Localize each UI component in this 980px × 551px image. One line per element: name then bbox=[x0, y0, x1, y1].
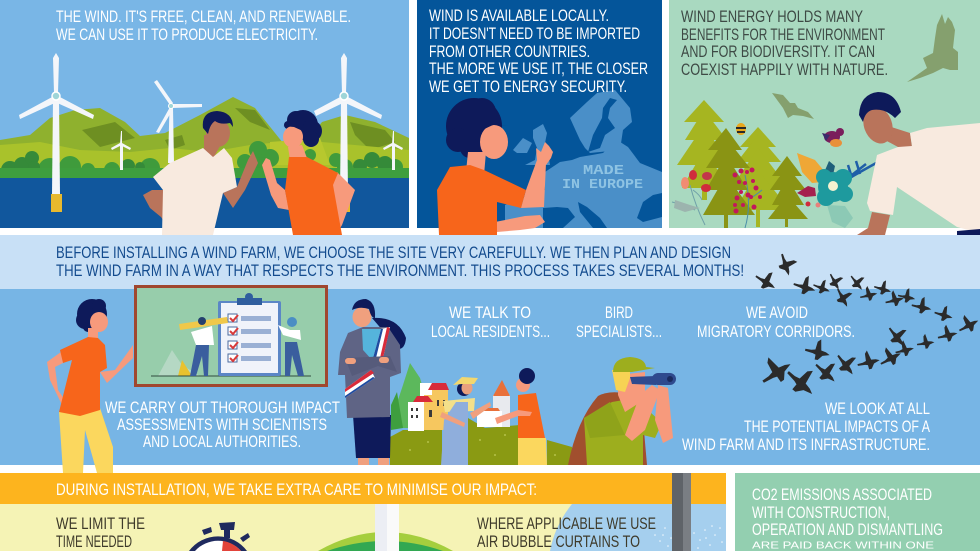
church bbox=[493, 395, 510, 427]
shirt bbox=[437, 165, 526, 235]
text: before installing: THE WIND FARM IN A WAY THAT RESPECTS THE ENVIRONMENT. THIS PROCESS TAKES SEVERAL MONTHS! bbox=[56, 261, 744, 280]
hair bbox=[352, 299, 375, 318]
strip: site selection bbox=[0, 235, 980, 289]
hair bbox=[446, 98, 502, 158]
text: impact assessments bbox=[105, 398, 340, 451]
lower arm bbox=[495, 215, 545, 232]
trousers bbox=[59, 408, 113, 473]
flower bouquet bbox=[797, 153, 878, 228]
neck bbox=[288, 145, 307, 157]
panel: CO2 emissions bbox=[735, 473, 980, 551]
text: available locally: WE GET TO ENERGY SECURITY. bbox=[429, 77, 627, 96]
heading: the wind bbox=[56, 7, 351, 44]
neck bbox=[885, 125, 912, 147]
text: bird specialists: BIRD bbox=[605, 303, 633, 322]
icon: bat bbox=[772, 93, 814, 119]
board: impact assessment bbox=[134, 285, 328, 387]
head bbox=[858, 102, 898, 148]
Mediterranean bbox=[543, 207, 575, 228]
fringe bbox=[284, 126, 301, 130]
face bbox=[618, 372, 645, 412]
arm bbox=[857, 212, 890, 235]
tree 3 bbox=[730, 127, 790, 227]
text: limit the time: WE LIMIT THE bbox=[56, 514, 145, 533]
text: impact assessments: WE CARRY OUT THOROUGH IMPACT bbox=[105, 398, 340, 417]
label: made in Europe: MADE bbox=[583, 163, 624, 179]
panel: planning bbox=[0, 285, 980, 473]
shoe bbox=[957, 229, 980, 235]
icon: wind turbine right bbox=[314, 53, 382, 212]
tree 1 bbox=[677, 100, 730, 200]
fringe bbox=[478, 122, 508, 132]
panel: benefits for biodiversity bbox=[669, 0, 980, 228]
binoculars bbox=[630, 376, 656, 385]
air bubbles bbox=[654, 524, 723, 549]
panel: during installation bbox=[0, 473, 726, 551]
text: talk to local residents: WE TALK TO bbox=[449, 303, 531, 322]
illustration: hills and sea bbox=[0, 97, 409, 228]
text: potential impacts bbox=[682, 399, 930, 454]
green hill bbox=[318, 532, 453, 551]
panel: wind is available locally bbox=[417, 0, 662, 228]
hair bbox=[203, 111, 233, 134]
jacket bbox=[338, 327, 401, 418]
text: limit the time: TIME NEEDED bbox=[56, 532, 132, 551]
sash upper bbox=[373, 327, 390, 358]
sash lower bbox=[345, 370, 375, 398]
person: birdwatcher bbox=[568, 357, 676, 465]
shirt bbox=[584, 398, 662, 465]
person: mayor with sash bbox=[338, 299, 406, 465]
icon: wind turbine centre bbox=[154, 80, 202, 163]
arm bbox=[521, 160, 546, 208]
head bbox=[480, 125, 508, 159]
tree 2 bbox=[703, 128, 755, 228]
crossed arms bbox=[345, 356, 397, 376]
text: migratory corridors bbox=[697, 303, 855, 341]
icon: small bird bbox=[822, 128, 844, 147]
woman in orange bbox=[495, 368, 547, 465]
blouse bbox=[362, 329, 381, 360]
skirt bbox=[353, 415, 391, 458]
head bbox=[352, 307, 372, 327]
label: made in Europe bbox=[562, 163, 643, 193]
text: during installation: DURING INSTALLATION, WE TAKE EXTRA CARE TO MINIMISE OUR IMPACT: bbox=[56, 480, 537, 499]
text: air bubble curtains bbox=[477, 514, 656, 551]
text: talk to local residents: LOCAL RESIDENTS... bbox=[431, 322, 550, 341]
text: available locally: FROM OTHER COUNTRIES. bbox=[429, 42, 590, 61]
text: air bubble curtains: AIR BUBBLE CURTAINS TO bbox=[477, 532, 640, 551]
text: bird specialists bbox=[576, 303, 662, 341]
neck bbox=[88, 328, 98, 340]
hills bbox=[390, 430, 442, 465]
person: man watching nature bbox=[857, 92, 980, 235]
white house bbox=[408, 402, 424, 431]
sleeve bbox=[584, 402, 625, 438]
man with pencil bbox=[179, 317, 228, 376]
text: CO2 payback: WITH CONSTRUCTION, bbox=[752, 503, 890, 522]
heading: the wind: THE WIND. IT'S FREE, CLEAN, AND RENEWABLE. bbox=[56, 7, 351, 26]
shirt bbox=[285, 157, 342, 235]
rosehips bbox=[672, 170, 712, 225]
shirt bbox=[59, 337, 107, 416]
shirt bbox=[153, 148, 237, 235]
text: available locally: WIND IS AVAILABLE LOCALLY. bbox=[429, 6, 609, 25]
water bbox=[550, 504, 726, 551]
Ireland bbox=[513, 138, 532, 153]
hair bbox=[76, 299, 107, 332]
woman pointing bbox=[278, 317, 304, 376]
Adriatic bbox=[578, 202, 607, 228]
Scandinavia and Finland bbox=[570, 90, 632, 153]
continent bbox=[505, 140, 662, 228]
icon: wind turbine left bbox=[19, 53, 94, 212]
legs bbox=[358, 455, 369, 465]
text: wind energy benefits: WIND ENERGY HOLDS MANY bbox=[681, 7, 863, 26]
Black Sea bbox=[637, 193, 662, 222]
ponytail bbox=[372, 318, 406, 349]
icon: small wind turbine right bbox=[383, 131, 403, 170]
text: wind energy benefits bbox=[681, 7, 888, 79]
yellow house bbox=[420, 383, 436, 397]
text: available locally: IT DOESN'T NEED TO BE IMPORTED bbox=[429, 24, 640, 43]
text: before installing bbox=[56, 243, 744, 280]
neck and arms bbox=[204, 135, 220, 157]
farmer woman bbox=[440, 377, 491, 465]
Britain bbox=[525, 124, 550, 165]
text: potential impacts: WE LOOK AT ALL bbox=[825, 399, 930, 418]
turbine tower bbox=[375, 504, 399, 551]
icon: bee bbox=[736, 123, 746, 135]
hair bbox=[859, 92, 901, 122]
second arm bbox=[655, 385, 673, 443]
text: wind energy benefits: AND FOR BIODIVERSITY. IT CAN bbox=[681, 42, 875, 61]
village scene bbox=[390, 363, 572, 465]
tree bbox=[398, 363, 425, 428]
text: migratory corridors: MIGRATORY CORRIDORS. bbox=[697, 322, 855, 341]
berries bbox=[732, 168, 762, 228]
flock of migrating birds bbox=[752, 250, 980, 401]
clipboard bbox=[218, 293, 281, 376]
text: talk to local residents bbox=[431, 303, 550, 341]
text: available locally: THE MORE WE USE IT, THE CLOSER bbox=[429, 59, 648, 78]
map of Europe bbox=[505, 90, 662, 228]
icon: eagle bbox=[907, 14, 958, 82]
tree 4 bbox=[768, 156, 808, 227]
trees bbox=[677, 100, 808, 228]
text: air bubble curtains: WHERE APPLICABLE WE USE bbox=[477, 514, 656, 533]
text: limit the time bbox=[56, 514, 145, 551]
icon: small wind turbine bbox=[111, 131, 131, 170]
hand bbox=[536, 142, 553, 165]
text: impact assessments: AND LOCAL AUTHORITIES. bbox=[143, 432, 301, 451]
text: migratory corridors: WE AVOID bbox=[746, 303, 808, 322]
text: wind energy benefits: COEXIST HAPPILY WITH NATURE. bbox=[681, 60, 888, 79]
text: before installing: BEFORE INSTALLING A WIND FARM, WE CHOOSE THE SITE VERY CAREFULLY. WE THEN PLAN AND DESIGN bbox=[56, 243, 731, 262]
cap bbox=[613, 357, 655, 372]
head bbox=[90, 312, 108, 332]
pile being installed bbox=[672, 473, 691, 551]
heading: the wind: WE CAN USE IT TO PRODUCE ELECTRICITY. bbox=[56, 25, 318, 44]
person: woman pointing at map bbox=[437, 98, 553, 235]
text: available locally bbox=[429, 6, 648, 96]
arm bbox=[625, 385, 660, 441]
Baltic sea bbox=[588, 98, 617, 152]
panel: the wind is free bbox=[0, 0, 409, 228]
orange heading bar bbox=[0, 473, 726, 504]
label: made in Europe: IN EUROPE bbox=[562, 177, 643, 193]
person: woman by board bbox=[47, 299, 133, 473]
head bbox=[206, 119, 230, 147]
backpack bbox=[568, 392, 647, 465]
text: CO2 payback bbox=[752, 485, 943, 551]
head bbox=[283, 126, 303, 148]
person: man with hand raised bbox=[143, 111, 258, 235]
icon: stopwatch bbox=[189, 522, 250, 551]
text: impact assessments: ASSESSMENTS WITH SCIENTISTS bbox=[117, 415, 327, 434]
text: wind energy benefits: BENEFITS FOR THE ENVIRONMENT bbox=[681, 25, 885, 44]
shirt bbox=[867, 123, 980, 233]
hair bbox=[284, 110, 322, 147]
text: bird specialists: SPECIALISTS... bbox=[576, 322, 662, 341]
person: woman talking bbox=[262, 110, 355, 235]
neck bbox=[466, 152, 486, 175]
